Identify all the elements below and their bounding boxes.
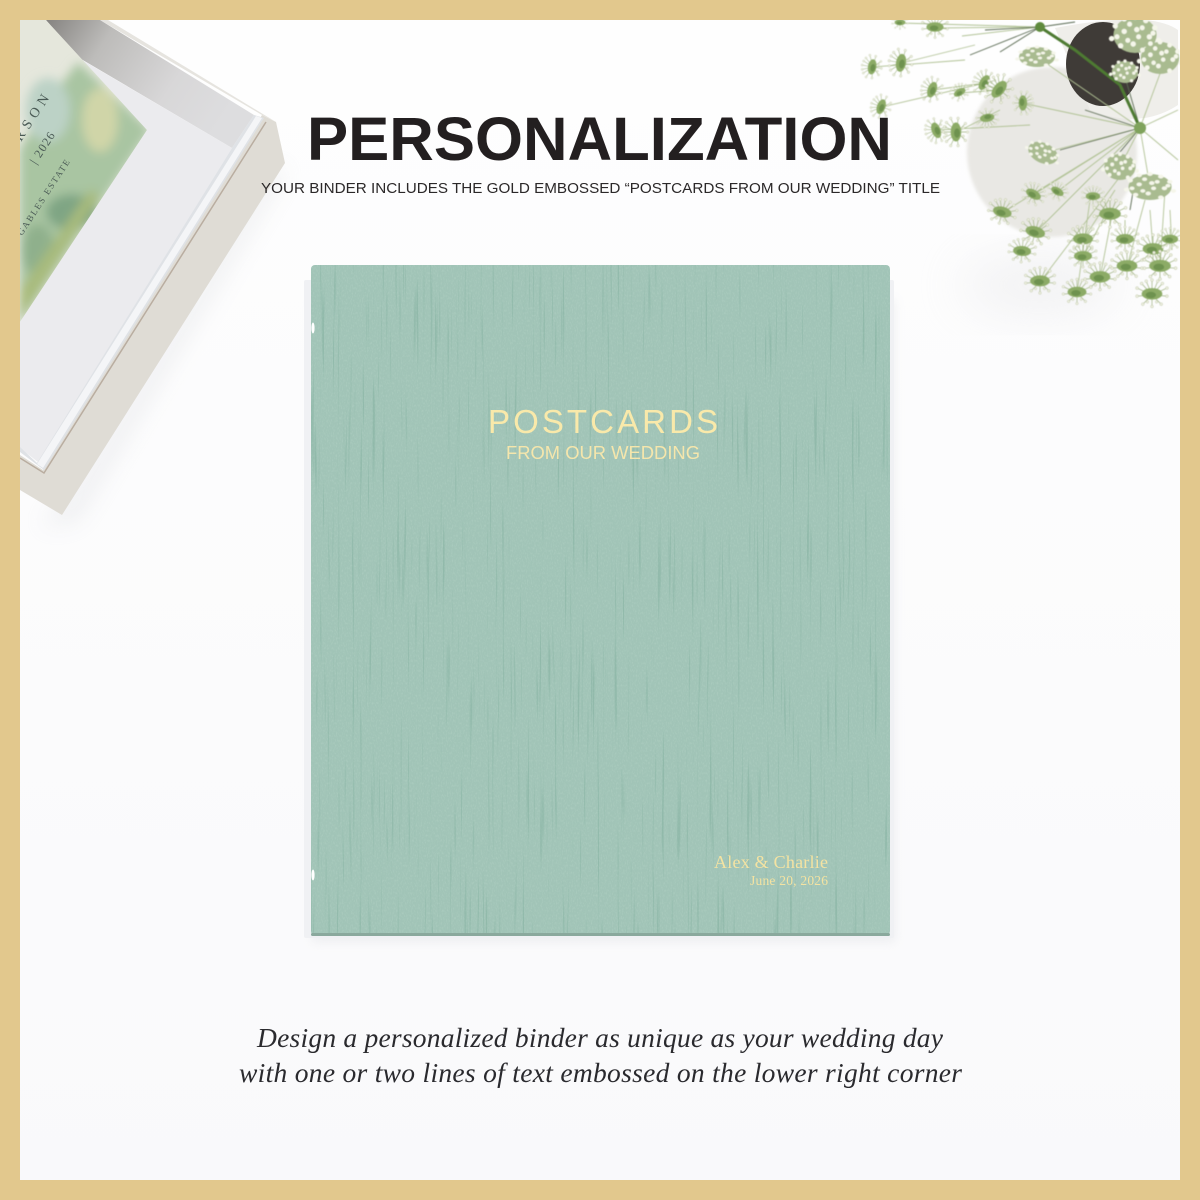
background shadow	[1013, 274, 1067, 296]
clear back sheet	[304, 280, 894, 938]
bottom edge	[311, 933, 890, 936]
stationery card: GABLES ESTATE	[15, 156, 73, 237]
box rim seam	[20, 122, 266, 473]
embossed subtitle: FROM OUR WEDDING	[506, 443, 700, 463]
stationery card: | 2026	[27, 128, 58, 167]
card printed text: RSON	[12, 88, 56, 144]
box inner wall	[46, 20, 254, 148]
box top edge	[100, 20, 276, 122]
embossed names: Alex & Charlie	[714, 852, 828, 872]
photo: gift box with stationery card	[12, 20, 285, 525]
stems	[873, 23, 1178, 293]
vase rim	[1055, 19, 1178, 119]
embossed title: POSTCARDS	[488, 403, 718, 440]
ring holes	[311, 322, 315, 334]
stationery card	[12, 20, 150, 325]
caption	[239, 1022, 962, 1088]
silk streaks	[311, 265, 890, 935]
subtitle: YOUR BINDER INCLUDES THE GOLD EMBOSSED “POSTCARDS FROM OUR WEDDING” TITLE	[261, 181, 940, 197]
umbel hubs	[1134, 122, 1146, 134]
flower umbels	[859, 14, 1183, 308]
dark bracts	[970, 22, 1140, 210]
caption: Design a personalized binder as unique as your wedding day	[256, 1022, 944, 1053]
photo: vase with queen anne's lace	[859, 14, 1183, 313]
caption: with one or two lines of text embossed on the lower right corner	[239, 1057, 962, 1088]
vase mouth	[1066, 22, 1140, 106]
title: PERSONALIZATION	[307, 105, 892, 173]
vase body	[967, 67, 1137, 237]
box outer body	[20, 115, 285, 515]
box white rim	[20, 115, 264, 470]
embossed date: June 20, 2026	[750, 873, 828, 888]
flowers	[859, 14, 1183, 308]
binder shadow	[312, 300, 895, 942]
box shadow	[64, 207, 258, 514]
linen cover	[311, 265, 890, 935]
fine grain	[311, 265, 890, 935]
box floor	[20, 54, 232, 462]
main stem	[1040, 27, 1140, 128]
binder	[304, 265, 895, 942]
